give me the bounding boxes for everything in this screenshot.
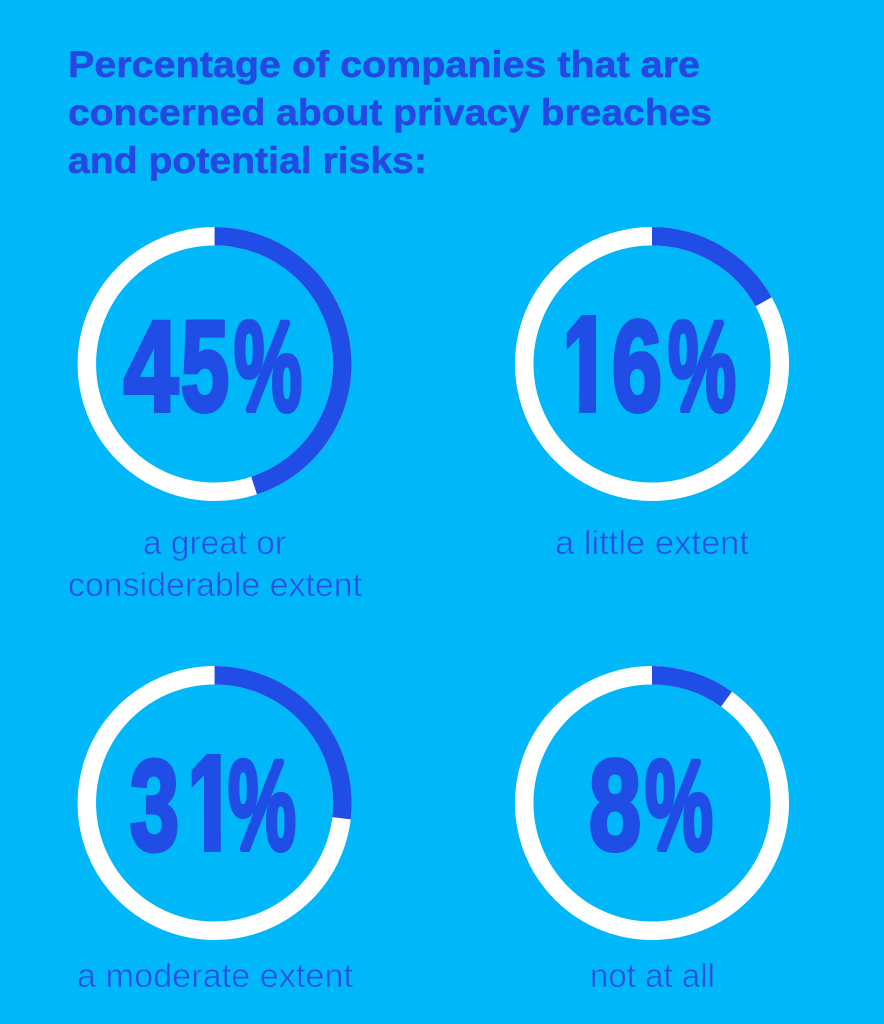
value: 31%: 1 — [196, 734, 230, 878]
value: 8%: 8 — [589, 734, 641, 878]
value: 45%: 5 — [181, 296, 229, 438]
value: 8% — [589, 734, 713, 878]
value: 16%: % — [668, 296, 736, 438]
value: 45%: 4 — [124, 296, 178, 438]
title: concerned about privacy breaches — [68, 91, 712, 133]
value: 8%: % — [645, 734, 713, 878]
title: and potential risks: — [68, 139, 427, 181]
panel: 16% a little extent — [524, 236, 780, 562]
panel: 45% a great or considerable extent — [68, 236, 363, 604]
label: not at all: not at all — [590, 958, 715, 995]
value: 31% — [130, 754, 296, 854]
value: 16%: 6 — [612, 296, 662, 438]
label: a great or considerable extent: a great or — [143, 525, 286, 562]
title: Percentage of companies that are — [68, 43, 700, 85]
value: 31%: 3 — [130, 734, 179, 878]
donut: 31% — [87, 675, 342, 931]
value: 16% — [566, 315, 736, 414]
value: 45% — [124, 296, 302, 438]
donut: 8% — [524, 675, 780, 931]
label: a great or considerable extent — [68, 525, 363, 604]
value: 16%: 1 — [570, 296, 604, 438]
label: a little extent: a little extent — [555, 525, 750, 562]
value: 31%: % — [228, 734, 296, 878]
donut: 16% — [524, 236, 780, 492]
panel: 8% not at all — [524, 675, 780, 995]
value: 45%: % — [234, 296, 302, 438]
label: a moderate extent: a moderate extent — [77, 958, 354, 995]
panel: 31% a moderate extent — [77, 675, 354, 995]
donut: 45% — [87, 236, 342, 492]
label: a great or considerable extent: considerable extent — [68, 567, 363, 604]
title — [68, 43, 712, 181]
